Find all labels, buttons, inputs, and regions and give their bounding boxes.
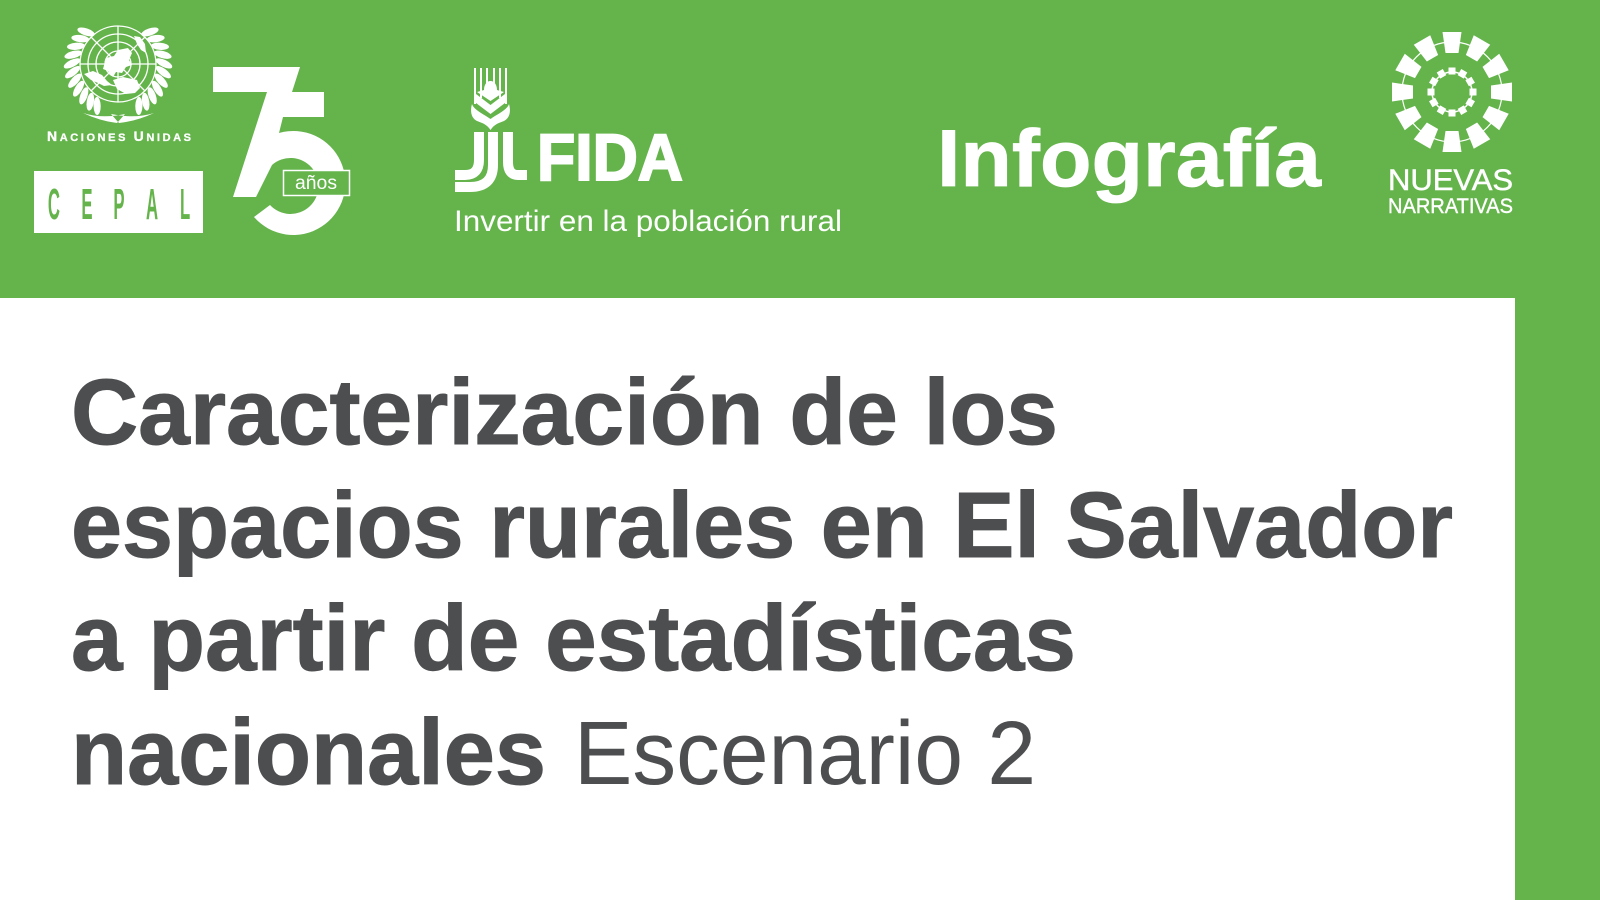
icon: wheat — [471, 68, 510, 130]
icon: UN globe — [80, 26, 156, 102]
logo: 75 años — [213, 67, 350, 235]
title: Caracterización de los — [71, 360, 1058, 464]
icon: UN wreath — [62, 26, 174, 123]
logo: FIDA — [455, 68, 683, 194]
heading: Infografía: Infografía — [937, 114, 1322, 204]
logo: CEPAL: CEPAL — [48, 181, 190, 230]
logo: CEPAL — [34, 171, 203, 233]
logo: Nuevas Narrativas — [1388, 32, 1513, 218]
text: Naciones Unidas: NACIONES UNIDAS — [47, 128, 191, 144]
logo: 75 años: años — [295, 173, 337, 194]
icon: FIDA stylised letters — [455, 132, 527, 187]
title: a partir de estadísticas — [71, 586, 1076, 690]
logo: Naciones Unidas emblem — [62, 26, 174, 123]
text: NARRATIVAS: NARRATIVAS — [1388, 195, 1513, 218]
text: NUEVAS: NUEVAS — [1388, 164, 1513, 197]
white title panel — [0, 298, 1515, 900]
text: Invertir en la población rural: Invertir en la población rural — [454, 205, 842, 238]
title — [71, 360, 1453, 804]
title: nacionales — [71, 700, 546, 804]
title: espacios rurales en El Salvador — [71, 473, 1453, 577]
title: Escenario 2 — [574, 704, 1036, 804]
icon: ring of blocks — [1392, 32, 1512, 152]
text: FIDA: FIDA — [537, 120, 683, 194]
